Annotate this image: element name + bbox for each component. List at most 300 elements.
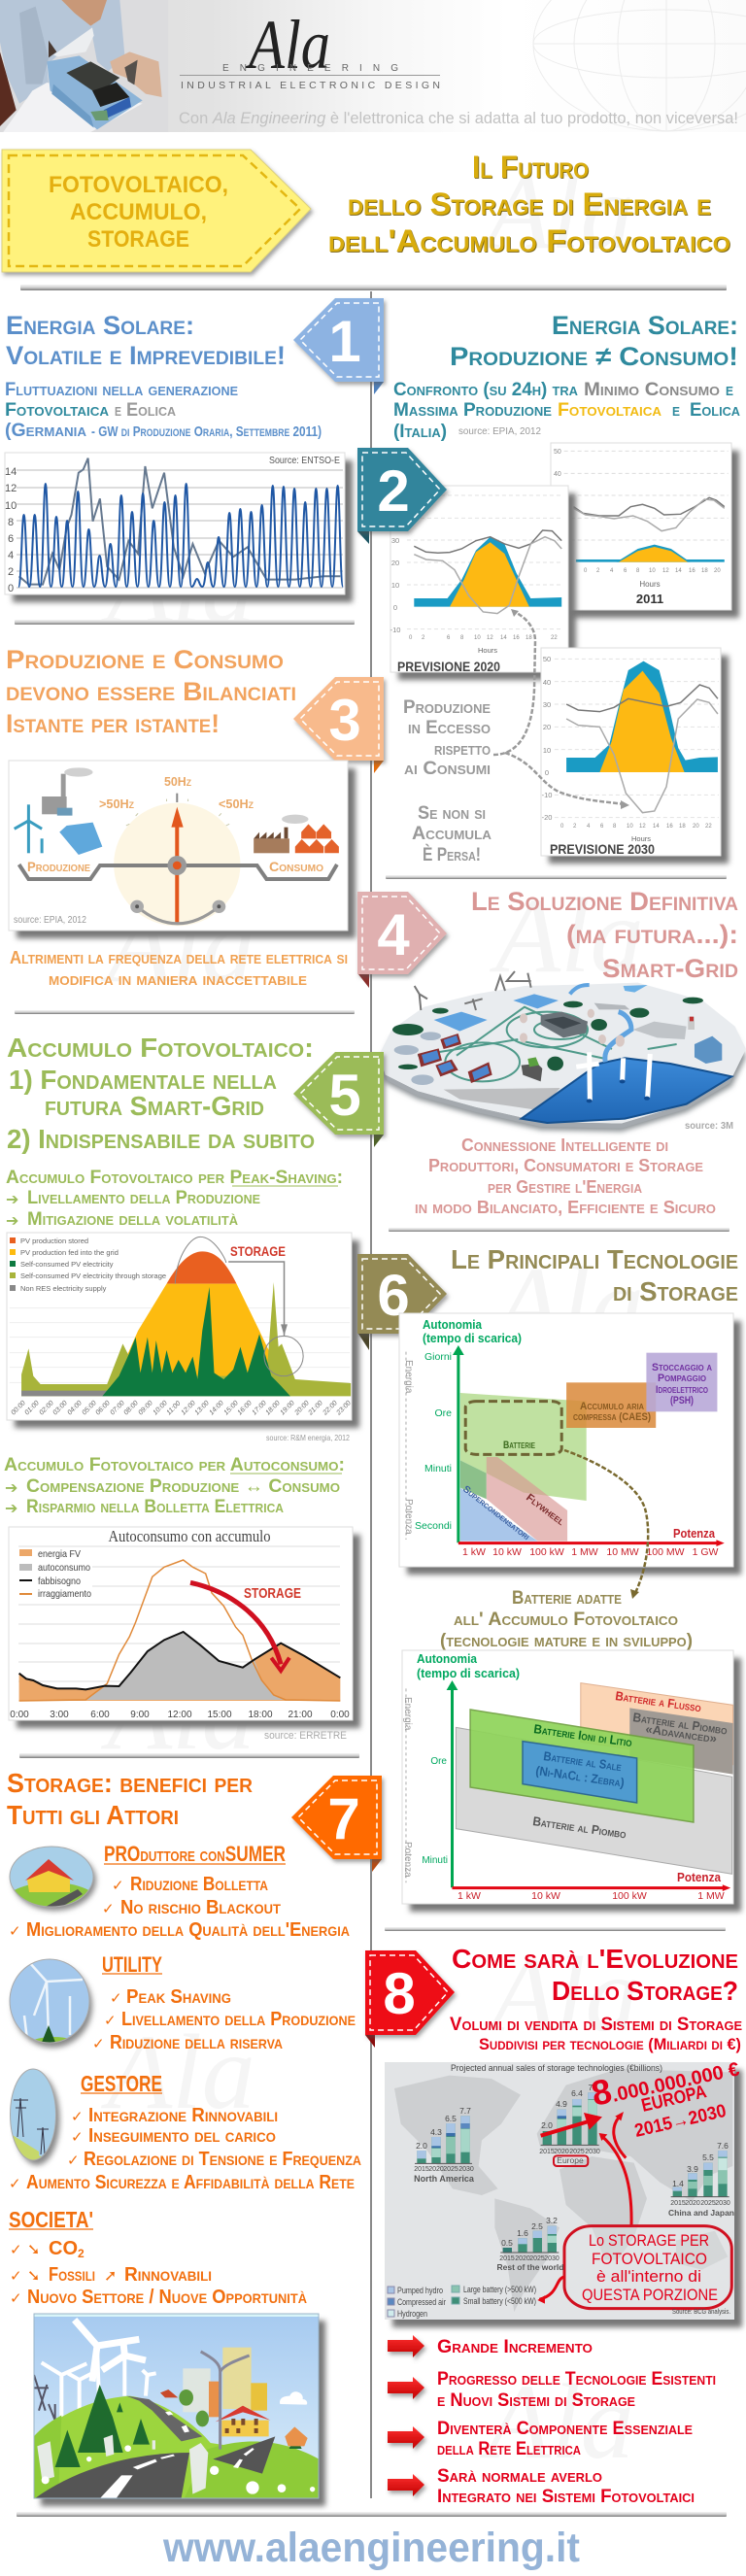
- note: grid frequency: Altrimenti la frequenza della rete elettrica si: [10, 948, 348, 967]
- chart: storage technologies: Accumulo aria: [580, 1401, 644, 1412]
- subtext: Italy comparison: (Italia): [393, 422, 447, 442]
- subheading: peak shaving: Accumulo Fotovoltaico per Peak-Shaving:: [6, 1168, 343, 1188]
- icon: wind turbines: [15, 804, 42, 853]
- subtext: Italy comparison: Eolica: [690, 400, 741, 421]
- section: prosumer: [9, 1842, 350, 1941]
- chart: peak shaving: 22:00: [322, 1400, 339, 1417]
- subheading: peak shaving: Mitigazione della volatilità: [27, 1209, 239, 1230]
- section: society: CO: [49, 2238, 78, 2259]
- legend: Hydrogen: [397, 2309, 427, 2319]
- text: excess production: Produzione: [403, 697, 491, 718]
- yellow tag: ACCUMULO,: [70, 199, 207, 225]
- section: society: ✓: [10, 2241, 22, 2258]
- heading: PV storage: futura Smart-Grid: [45, 1091, 264, 1121]
- chart 2020: 2: [422, 635, 425, 641]
- heading: balance: [6, 645, 296, 738]
- chart: peak shaving: 08:00: [122, 1400, 140, 1416]
- chart 2020: 14: [500, 635, 507, 641]
- chart: peak shaving: 03:00: [51, 1400, 69, 1416]
- section: grid operator: ✓: [9, 2175, 21, 2192]
- bars: Rest of the world: [503, 2226, 557, 2253]
- section: grid operator: Inseguimento del carico: [88, 2125, 276, 2147]
- section: society: Fossili: [49, 2264, 95, 2286]
- bars: China and Japan: [673, 2151, 728, 2197]
- panel: world map sales: 2020: [515, 2255, 530, 2262]
- chart: peak shaving: 15:00: [222, 1400, 240, 1416]
- chart: storage technologies: Idroelettrico: [656, 1384, 708, 1396]
- badge 3: 3: [328, 688, 361, 753]
- text: excess production: È Persa!: [423, 844, 481, 865]
- chart: peak shaving: 17:00: [251, 1400, 268, 1416]
- chart 2030: 6: [600, 824, 604, 830]
- chart 2030: 2: [573, 824, 577, 830]
- list: outlook: Diventerà Componente Essenziale: [437, 2419, 693, 2439]
- legend: [10, 1237, 166, 1293]
- legend: Self-consumed PV electricity through storage: [20, 1271, 166, 1280]
- heading: evolution: Come sarà l'Evoluzione: [452, 1944, 738, 1974]
- dashed arrows to charts: [493, 609, 629, 809]
- callout: PV portion: Lo STORAGE PER: [589, 2231, 709, 2250]
- icon: house globe: [9, 1846, 100, 1915]
- chart: peak shaving: 00:00: [10, 1400, 27, 1416]
- chart 2030: 0: [560, 824, 564, 830]
- badge 4: 4: [377, 902, 410, 967]
- chart: batteries: Energia: [402, 1697, 413, 1731]
- panel: frequency balance: Consumo: [269, 859, 323, 874]
- infographic page: Ala: [484, 1935, 639, 2053]
- logo: ENGINEERING: [222, 63, 398, 74]
- icon: pylon globe: [8, 2067, 60, 2165]
- subheading: peak shaving: [6, 1168, 343, 1230]
- chart: peak shaving: [7, 1233, 359, 1428]
- panel: world map sales: 4.3: [430, 2127, 442, 2137]
- photo of engineer: [0, 0, 168, 132]
- chart: peak shaving: 10:00: [152, 1400, 169, 1416]
- chart 2030: 14: [653, 824, 660, 830]
- panel: world map sales: North America: [414, 2174, 475, 2184]
- section: society: 2: [78, 2247, 85, 2260]
- panel: world map sales: 7.6: [717, 2141, 729, 2151]
- subtext: Italy comparison: Massima Produzione: [393, 400, 552, 421]
- header banner: [0, 0, 746, 132]
- panel: world map sales: 2020: [428, 2166, 444, 2173]
- section: utility: ✓: [104, 2012, 117, 2029]
- legend: irraggiamento: [38, 1588, 91, 1600]
- chart 2011: 8: [636, 568, 640, 574]
- subtext: Italy comparison: Minimo Consumo: [584, 380, 720, 400]
- chart: batteries: Potenza: [402, 1842, 413, 1878]
- subtext: Germany fluctuations: e: [115, 400, 121, 421]
- panel: world map sales: 2015: [499, 2255, 515, 2262]
- subtext: Germany fluctuations: - GW di Produzione Oraria, Settembre 2011): [91, 424, 322, 440]
- text: excess production: rispetto: [434, 739, 491, 760]
- chart: Germany generation: 4: [8, 550, 14, 561]
- chart: storage technologies: 10 MW: [606, 1546, 639, 1558]
- chart: storage technologies: Energia: [403, 1360, 414, 1394]
- heading: production vs consumption: Produzione ≠ Consumo!: [450, 342, 738, 371]
- list: outlook: della Rete Elettrica: [437, 2439, 582, 2459]
- legend: PV production fed into the grid: [20, 1248, 119, 1257]
- chart 2020: [390, 486, 576, 680]
- subtext: Italy comparison: e: [672, 400, 680, 421]
- chart: peak shaving: 04:00: [66, 1400, 84, 1416]
- badge 4: [357, 892, 447, 988]
- logo: INDUSTRIAL ELECTRONIC DESIGN: [181, 80, 440, 91]
- chart 2011: 2: [596, 568, 600, 574]
- subheading: peak shaving: ➔: [6, 1211, 18, 1230]
- infographic page: Ala: [479, 2362, 634, 2481]
- chart: self-consumption: 21:00: [288, 1710, 313, 1720]
- badge 1: [293, 298, 384, 394]
- heading: balance: Produzione e Consumo: [6, 645, 284, 674]
- panel: frequency balance: [9, 761, 356, 938]
- chart: storage technologies: Flywheel: [524, 1492, 566, 1528]
- title: Il Futuro: [472, 150, 589, 185]
- chart 2011: 16: [689, 568, 695, 574]
- chart: peak shaving: 23:00: [335, 1400, 353, 1417]
- legend: fabbisogno: [38, 1576, 81, 1587]
- source note: source: R&M energia, 2012: [266, 1433, 350, 1442]
- chart: batteries: Potenza: [677, 1870, 722, 1884]
- chart 2011: 20: [714, 568, 721, 574]
- text: smart grid description: Connessione Intelligente di: [461, 1135, 668, 1155]
- section: society: SOCIETA': [9, 2207, 93, 2232]
- chart: batteries: «Adavanced»: [645, 1721, 718, 1746]
- text: smart grid description: in modo Bilanciato, Efficiente e Sicuro: [415, 1198, 716, 1217]
- heading: smart grid: Smart-Grid: [602, 954, 738, 983]
- chart 2011: 50: [554, 449, 561, 456]
- heading: smart grid: Le Soluzione Definitiva: [471, 887, 738, 916]
- chart 2011: Hours: [639, 580, 661, 589]
- illustration: green city: [29, 2314, 325, 2506]
- chart: peak shaving: STORAGE: [230, 1243, 286, 1259]
- chart: peak shaving: 21:00: [307, 1400, 324, 1417]
- subtext: Germany fluctuations: (Germania: [5, 421, 87, 441]
- chart 2011: 0: [584, 568, 588, 574]
- chart: storage technologies: 1 GW: [693, 1546, 719, 1558]
- list: outlook: Grande Incremento: [437, 2337, 593, 2357]
- badge 5: 5: [328, 1063, 361, 1128]
- chart: self-consumption: 6:00: [90, 1710, 110, 1720]
- chart: batteries: Batterie Ioni di Litio: [533, 1721, 633, 1749]
- note: grid frequency: [10, 948, 348, 989]
- chart: storage technologies: Stoccaggio a: [652, 1362, 712, 1373]
- text: suitable batteries: Batterie adatte: [512, 1588, 622, 1609]
- heading: production vs consumption: Energia Solare:: [552, 311, 738, 340]
- text: smart grid description: Produttori, Consumatori e Storage: [428, 1156, 703, 1175]
- chart 2020: 0: [393, 603, 397, 612]
- chart: storage technologies: [399, 1313, 741, 1575]
- callout: 8 billion euro: 8.000.000.000 €: [588, 2044, 742, 2114]
- infographic page: Ala: [489, 1245, 644, 1364]
- subtext: Italy comparison: [393, 380, 741, 442]
- callout: 8 billion euro: 2015→2030: [632, 2101, 729, 2142]
- section: prosumer: PROduttore conSUMER: [104, 1842, 286, 1866]
- source note: source: EPIA, 2012: [458, 425, 541, 437]
- chart 2030: 16: [666, 824, 673, 830]
- chart 2020: 30: [391, 536, 399, 545]
- chart 2030: -20: [542, 813, 552, 822]
- chart: batteries: Batterie al Piombo: [632, 1710, 729, 1738]
- chart 2020: PREVISIONE 2020: [397, 659, 500, 674]
- panel: world map sales: 1.6: [517, 2228, 528, 2238]
- heading: smart grid: (ma futura...):: [566, 920, 738, 949]
- chart 2020: Hours: [478, 646, 497, 655]
- chart 2030: [541, 648, 729, 864]
- chart 2030: 0: [545, 768, 549, 777]
- subtext: sales volumes: Suddivisi per tecnologie (Miliardi di €): [479, 2035, 741, 2053]
- chart 2030: 8: [613, 824, 617, 830]
- legend: autoconsumo: [38, 1562, 90, 1574]
- chart: Germany generation: 6: [8, 533, 14, 545]
- chart: self-consumption: 3:00: [50, 1710, 69, 1720]
- heading: balance: devono essere Bilanciati: [6, 677, 296, 706]
- chart 2020: -10: [390, 626, 400, 634]
- chart 2030: 10: [543, 746, 551, 755]
- chart: storage technologies: 1 MW: [571, 1546, 598, 1558]
- chart: storage technologies: Potenza: [403, 1499, 414, 1535]
- chart 2030: -10: [542, 791, 552, 799]
- chart 2011: 4: [610, 568, 614, 574]
- illustration: smart grid island: [379, 971, 746, 1132]
- list: outlook: [437, 2337, 716, 2507]
- badge 6: [357, 1254, 447, 1350]
- chart: Germany generation: 2: [8, 566, 14, 578]
- subheading: self-consumption: Risparmio nella Bolletta Elettrica: [26, 1497, 285, 1517]
- chart: storage technologies: Supercondensatori: [460, 1484, 531, 1542]
- section: grid operator: [9, 2071, 361, 2193]
- section: prosumer: ✓: [9, 1922, 21, 1940]
- heading: benefits: [7, 1768, 254, 1830]
- section: society: [9, 2207, 307, 2308]
- badge 2: [357, 448, 447, 544]
- chart: self-consumption: 0:00: [330, 1710, 350, 1720]
- list: outlook: Integrato nei Sistemi Fotovoltaici: [437, 2487, 695, 2507]
- chart 2030: Hours: [631, 834, 651, 843]
- legend: [19, 1548, 91, 1600]
- panel: frequency balance: <50Hz: [219, 797, 254, 811]
- heading: balance: Istante per istante!: [6, 709, 220, 738]
- panel: world map sales: 3.2: [546, 2216, 558, 2225]
- heading: PV storage: Accumulo Fotovoltaico:: [7, 1033, 314, 1063]
- chart 2020: 22: [551, 635, 558, 641]
- chart: batteries: Batterie a Flusso: [615, 1688, 702, 1714]
- text: excess production: [403, 697, 492, 865]
- text: excess production: in Eccesso: [408, 718, 491, 738]
- section: utility: Livellamento della Produzione: [121, 2009, 356, 2030]
- section: society: Rinnovabili: [124, 2264, 212, 2286]
- heading: volatile solar: [6, 311, 286, 370]
- chart 2030: 30: [543, 700, 551, 709]
- chart: self-consumption: 9:00: [130, 1710, 150, 1720]
- chart: batteries: [402, 1650, 741, 1912]
- panel: frequency balance: >50Hz: [99, 797, 134, 811]
- chart: storage technologies: Potenza: [673, 1526, 716, 1541]
- section: prosumer: Riduzione Bolletta: [130, 1874, 268, 1895]
- panel: world map sales: 2025: [569, 2149, 585, 2155]
- infographic page: Ala: [100, 526, 255, 645]
- panel: world map sales: 2030: [715, 2200, 730, 2207]
- icon: red arrows: [388, 2335, 424, 2496]
- panel: world map sales: 2015: [670, 2200, 686, 2207]
- chart: self-consumption: 12:00: [167, 1710, 192, 1720]
- section: utility: UTILITY: [102, 1952, 162, 1977]
- chart: storage technologies: (PSH): [670, 1395, 694, 1407]
- subheading: self-consumption: Accumulo Fotovoltaico per Autoconsumo:: [4, 1455, 345, 1475]
- chart: self-consumption: 0:00: [10, 1710, 29, 1720]
- section: grid operator: Regolazione di Tensione e Frequenza: [84, 2149, 361, 2170]
- chart 2011: 6: [624, 568, 627, 574]
- chart: storage technologies: Secondi: [415, 1520, 452, 1532]
- chart 2020: 16: [513, 635, 520, 641]
- section: grid operator: Aumento Sicurezza e Affidabilità della Rete: [26, 2172, 355, 2193]
- badge 8: [365, 1950, 455, 2048]
- chart 2030: 10: [627, 824, 633, 830]
- section: prosumer: No rischio Blackout: [120, 1897, 281, 1918]
- section: utility: [92, 1952, 356, 2053]
- chart: peak shaving: 16:00: [236, 1400, 254, 1416]
- panel: frequency balance: Produzione: [27, 859, 90, 874]
- chart 2011: 40: [554, 471, 561, 478]
- infographic page: Ala: [489, 876, 644, 995]
- panel: world map sales: 5.5: [702, 2152, 714, 2162]
- heading: smart grid: [471, 887, 738, 983]
- chart: batteries: 1 kW: [458, 1890, 481, 1902]
- subheading: peak shaving: Livellamento della Produzione: [27, 1188, 260, 1208]
- yellow tag: STORAGE: [87, 226, 189, 253]
- panel: world map sales: 2020: [554, 2149, 569, 2155]
- subtext: Germany fluctuations: Eolica: [126, 400, 177, 421]
- panel: world map sales: 2015: [414, 2166, 429, 2173]
- dashed arrow to batteries: [564, 1450, 648, 1599]
- section: prosumer: Miglioramento della Qualità dell'Energia: [26, 1919, 350, 1941]
- badge 7: 7: [327, 1786, 360, 1851]
- chart 2020: 20: [391, 559, 399, 567]
- chart 2020: 10: [474, 635, 481, 641]
- chart 2030: 50: [543, 655, 551, 663]
- badge 5: [293, 1052, 384, 1147]
- panel: world map sales: Europe: [557, 2155, 584, 2165]
- panel: world map sales: 6.4: [571, 2088, 583, 2098]
- chart: batteries: 10 kW: [531, 1890, 560, 1902]
- panel: world map sales: 2030: [544, 2255, 560, 2262]
- badge 2: 2: [377, 458, 410, 524]
- heading: production vs consumption: [450, 311, 738, 371]
- legend: Source: BCG analysis.: [672, 2307, 730, 2316]
- infographic page: Ala: [100, 1653, 255, 1772]
- heading: technologies: [451, 1244, 738, 1306]
- subtext: sales volumes: Volumi di vendita di Sistemi di Storage: [450, 2015, 742, 2035]
- chart: Germany generation: 8: [8, 517, 14, 528]
- panel: world map sales: 2025: [529, 2255, 545, 2262]
- subheading: self-consumption: ➔: [5, 1478, 17, 1497]
- panel: world map sales: [385, 2044, 742, 2327]
- section: society: ✓: [10, 2289, 22, 2307]
- subheading: self-consumption: Compensazione Produzione ↔ Consumo: [26, 1476, 340, 1497]
- icon: power plant: [42, 767, 93, 816]
- wind series: [19, 458, 340, 585]
- chart: storage technologies: (tempo di scarica): [423, 1331, 522, 1345]
- legend: Pumped hydro: [397, 2286, 443, 2295]
- infographic page: Ala: [479, 153, 634, 271]
- text: smart grid description: [415, 1135, 716, 1217]
- panel: world map sales: 2030: [458, 2166, 474, 2173]
- subtext: Germany fluctuations: Fotovoltaica: [5, 400, 110, 421]
- section: prosumer: ✓: [102, 1900, 115, 1917]
- panel: world map sales: 7.: [588, 2083, 595, 2092]
- chart: peak shaving: 20:00: [293, 1400, 311, 1417]
- chart 2011: [551, 443, 739, 618]
- subtext: Germany fluctuations: [5, 380, 322, 441]
- tagline: Con Ala Engineering è l'elettronica che si adatta al tuo prodotto, non viceversa!: [179, 109, 738, 127]
- section: society: ✓: [10, 2267, 22, 2285]
- legend: Non RES electricity supply: [20, 1284, 107, 1293]
- chart 2030: 20: [693, 824, 699, 830]
- subtext: Germany fluctuations: Fluttuazioni nella generazione: [5, 380, 238, 400]
- subtext: sales volumes: [450, 2015, 742, 2053]
- panel: world map sales: 2.0: [541, 2120, 553, 2130]
- chart 2030: PREVISIONE 2030: [550, 841, 655, 857]
- legend: Large battery (>500 kW): [463, 2285, 536, 2294]
- chart 2011: 2011: [636, 592, 663, 606]
- chart: batteries: Ore: [430, 1756, 447, 1767]
- panel: world map sales: Rest of the world: [497, 2262, 563, 2272]
- panel: world map sales: 1.4: [672, 2179, 684, 2188]
- chart 2030: 40: [543, 678, 551, 687]
- panel: world map sales: 4.9: [556, 2099, 567, 2109]
- solar series: [18, 484, 343, 587]
- chart: batteries: (Ni-NaCl : Zebra): [535, 1763, 626, 1790]
- subtext: Italy comparison: e: [726, 380, 733, 400]
- text: smart grid description: per Gestire l'Energia: [488, 1177, 643, 1197]
- chart 2011: 18: [701, 568, 708, 574]
- title: dell'Accumulo Fotovoltaico: [328, 223, 730, 258]
- legend: energia FV: [38, 1548, 81, 1560]
- legend: Compressed air: [397, 2297, 446, 2307]
- chart: batteries: Autonomia: [417, 1651, 478, 1666]
- website url: www.alaengineering.it: [162, 2525, 580, 2571]
- badge 1: 1: [328, 309, 361, 374]
- legend: Self-consumed PV electricity: [20, 1260, 114, 1269]
- infographic page: Ala: [100, 886, 255, 1004]
- chart: Germany generation: [5, 453, 353, 602]
- chart 2030: 20: [543, 723, 551, 731]
- chart: storage technologies: Batterie: [503, 1440, 536, 1451]
- section: utility: Riduzione della riserva: [110, 2032, 283, 2053]
- chart 2020: 6: [447, 635, 451, 641]
- chart 2030: 18: [679, 824, 686, 830]
- chart: storage technologies: Pompaggio: [658, 1373, 706, 1384]
- subtext: Italy comparison: Confronto (su 24h) tra: [393, 380, 579, 400]
- chart: batteries: Batterie al Piombo: [532, 1813, 627, 1841]
- subheading: peak shaving: ➔: [6, 1190, 18, 1208]
- panel: world map sales: 2.0: [416, 2141, 427, 2151]
- bars: North America: [417, 2116, 470, 2163]
- chart 2011: 12: [662, 568, 669, 574]
- chart: batteries: 1 MW: [697, 1890, 725, 1902]
- chart: self-consumption: [9, 1527, 360, 1728]
- text: suitable batteries: (tecnologie mature e in sviluppo): [440, 1631, 693, 1651]
- legend: Small battery (<500 kW): [463, 2296, 536, 2306]
- chart: storage technologies: Autonomia: [423, 1317, 483, 1332]
- chart: Germany generation: 10: [5, 500, 17, 512]
- section: society: ➘: [27, 2266, 40, 2285]
- chart 2011: 14: [675, 568, 682, 574]
- callout: PV portion: QUESTA PORZIONE: [582, 2286, 718, 2304]
- callout: 8 billion euro: [588, 2044, 742, 2142]
- chart: peak shaving: 18:00: [264, 1400, 282, 1416]
- panel: world map sales: 2025: [443, 2166, 458, 2173]
